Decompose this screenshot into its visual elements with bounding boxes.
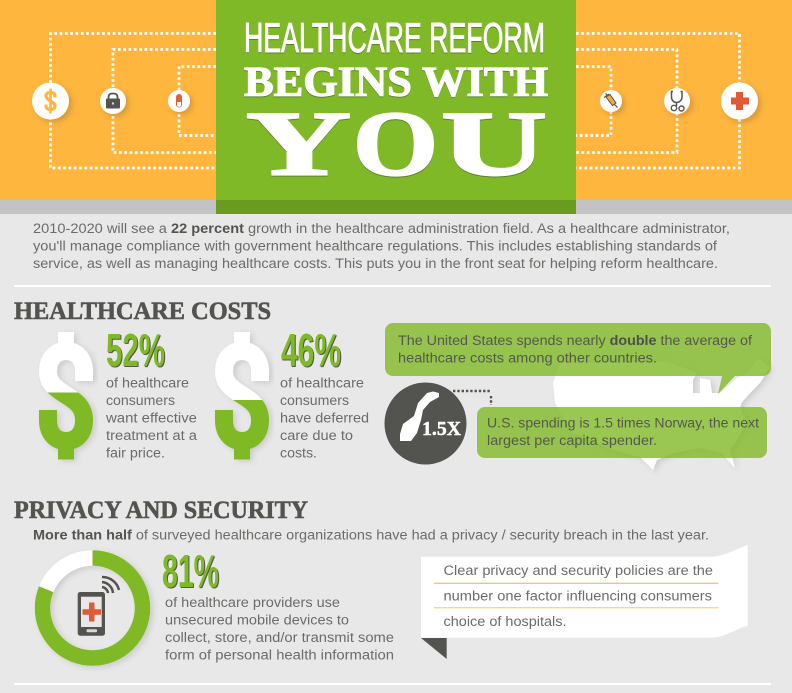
icon: mobile phone	[78, 577, 119, 636]
stat: 81 percent: form of personal health information	[165, 648, 394, 662]
icon: stethoscope	[664, 88, 690, 114]
stat: 46 percent: 46%	[281, 324, 341, 376]
stat: 46 percent: of healthcare	[280, 376, 364, 390]
stat: 81 percent: collect, store, and/or transmit some	[165, 630, 394, 645]
callout: Norway comparison	[477, 407, 767, 458]
stat: 81 percent: of healthcare providers use	[165, 595, 340, 610]
stat: 52 percent: consumers	[106, 393, 175, 408]
title panel: BEGINS WITH	[244, 60, 548, 106]
ribbon callout	[421, 545, 748, 659]
icon: dollar	[32, 82, 69, 120]
privacy summary text: More than half of surveyed healthcare organizations have had a privacy / security breach in the last year.	[33, 528, 709, 542]
icon: pill	[168, 90, 190, 112]
header banner	[0, 0, 792, 214]
ribbon callout: Clear privacy and security policies are the	[444, 563, 713, 578]
stat: 46 percent: consumers	[280, 393, 349, 408]
callout: Norway comparison: U.S. spending is 1.5 times Norway, the next	[487, 416, 759, 430]
ribbon callout: choice of hospitals.	[444, 614, 566, 629]
title panel: O	[353, 92, 438, 194]
stat: 81 percent: unsecured mobile devices to	[165, 612, 349, 628]
stat: 46 percent: have deferred	[280, 410, 369, 426]
intro paragraph	[33, 221, 730, 271]
stat: 52 percent	[105, 324, 198, 460]
connector: dotted line	[453, 391, 491, 405]
callout: double the average: healthcare costs among other countries.	[398, 350, 657, 366]
ribbon callout: number one factor influencing consumers	[444, 588, 712, 604]
intro paragraph: service, as well as managing healthcare costs. This puts you in the front seat for helping reform healthcare.	[33, 256, 718, 271]
title panel	[216, 0, 576, 214]
callout: Norway comparison: largest per capita spender.	[487, 433, 657, 448]
icon: lock	[100, 88, 126, 114]
stat: 52 percent: want effective	[105, 410, 197, 426]
stat: 46 percent: costs.	[280, 446, 317, 460]
stat: 46 percent	[280, 324, 369, 460]
icon: dollar 52 percent	[48, 332, 84, 460]
badge: Norway 1.5X: 1.5X	[422, 418, 462, 440]
heading: privacy and security: PRIVACY AND SECURITY	[14, 497, 308, 524]
stat: 52 percent: fair price.	[106, 446, 165, 460]
title panel: HEALTHCARE REFORM	[244, 14, 545, 61]
icon: dollar 46 percent	[224, 332, 260, 460]
title panel: Y	[246, 92, 351, 194]
heading: healthcare costs: HEALTHCARE COSTS	[14, 298, 271, 325]
stat: 81 percent	[162, 545, 394, 662]
title panel: U	[441, 92, 547, 194]
stat: 52 percent: of healthcare	[106, 376, 189, 390]
intro paragraph: 2010-2020 will see a 22 percent growth in the healthcare administration field. As a healthcare administrator,	[33, 221, 730, 236]
stat: 81 percent: 81%	[162, 545, 219, 597]
map: United States	[553, 358, 770, 470]
stat: 52 percent: 52%	[106, 324, 165, 376]
icon: medical cross	[721, 82, 758, 120]
callout: double the average: The United States spends nearly double the average of	[398, 333, 752, 348]
donut chart: 81 percent	[42, 558, 142, 658]
stat: 52 percent: treatment at a	[106, 428, 198, 443]
callout: double the average	[385, 323, 771, 394]
icon: syringe	[600, 90, 622, 112]
badge: Norway 1.5X	[384, 382, 466, 464]
intro paragraph: you'll manage compliance with government healthcare regulations. This includes establishing standards of	[33, 238, 717, 254]
stat: 46 percent: care due to	[280, 428, 353, 443]
